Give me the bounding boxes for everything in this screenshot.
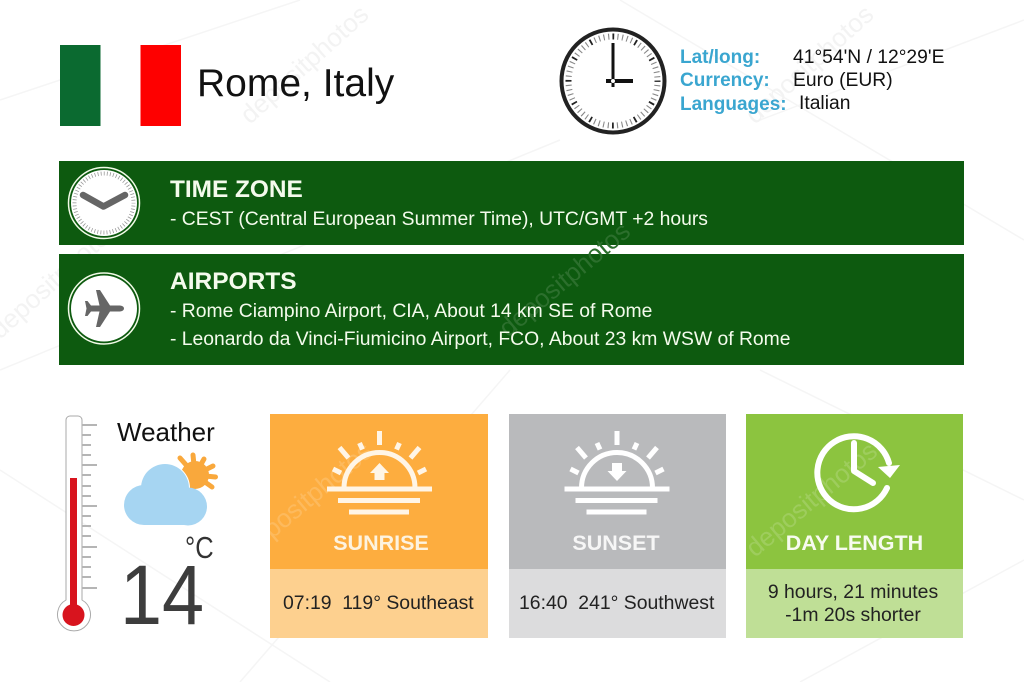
icon: rising sun — [327, 431, 432, 512]
time zone detail: - CEST (Central European Summer Time), UTC/GMT +2 hours — [170, 208, 708, 230]
text: depositphotos — [739, 0, 879, 129]
location facts: 41°54'N / 12°29'E — [793, 47, 945, 68]
sunrise data: 07:19 119° Southeast — [283, 592, 474, 614]
icon: clock with arrow — [817, 436, 900, 509]
panel: sunrise — [235, 414, 488, 638]
day length data: 9 hours, 21 minutes — [768, 581, 938, 603]
location facts: Italian — [799, 93, 850, 114]
watermark on sunrise card: depositphotos — [235, 436, 378, 563]
sunset data: 16:40 241° Southwest — [519, 592, 715, 614]
location facts: Lat/long: — [680, 47, 760, 68]
label: sunset: SUNSET — [572, 531, 660, 555]
icon: setting sun — [564, 431, 670, 512]
airport list — [170, 300, 791, 350]
location facts: Languages: — [680, 94, 787, 115]
icon: wall clock — [562, 30, 664, 132]
heading: time zone: TIME ZONE — [170, 176, 303, 203]
panel: time zone — [59, 161, 964, 245]
icon: clock — [68, 168, 140, 238]
day length data: -1m 20s shorter — [785, 604, 921, 626]
location facts: Euro (EUR) — [793, 70, 893, 91]
airport list: - Rome Ciampino Airport, CIA, About 14 km SE of Rome — [170, 300, 652, 322]
airport list: - Leonardo da Vinci-Fiumicino Airport, FCO, About 23 km WSW of Rome — [170, 328, 791, 350]
day length data — [768, 581, 938, 626]
icon: airplane — [68, 273, 140, 344]
watermark on day length card: depositphotos — [740, 436, 883, 563]
watermark on band: depositphotos — [493, 216, 636, 343]
icon: cloud and sun — [124, 455, 216, 526]
thermometer — [58, 416, 97, 631]
location facts: Currency: — [680, 70, 770, 91]
location facts — [680, 47, 945, 115]
heading: airports: AIRPORTS — [170, 268, 297, 295]
temperature value: 14 — [120, 548, 204, 642]
panel: day length — [740, 414, 963, 638]
label: sunrise: SUNRISE — [333, 531, 429, 555]
heading: weather: Weather — [117, 417, 215, 447]
flag of Italy — [60, 45, 181, 126]
temperature unit: °C — [185, 531, 214, 565]
title: Rome, Italy — [197, 62, 395, 105]
text: depositphotos — [234, 0, 374, 129]
panel: sunset — [509, 414, 726, 638]
label: day length: DAY LENGTH — [786, 531, 923, 555]
panel: airports — [59, 216, 964, 365]
